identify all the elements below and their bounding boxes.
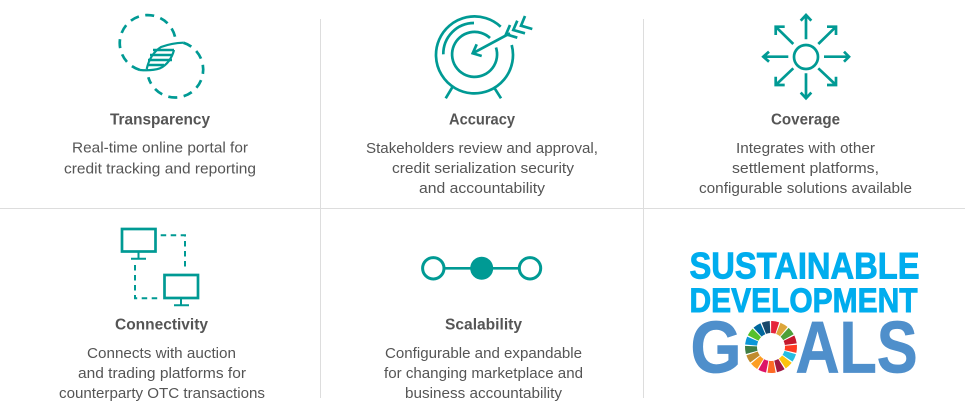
text: accuracy description: and accountability <box>419 180 546 197</box>
panel: scalability <box>384 257 583 402</box>
icon: circle with radiating arrows <box>763 15 849 98</box>
panel: coverage <box>699 15 912 197</box>
heading: Coverage: Coverage <box>771 112 840 128</box>
text: connectivity description <box>59 345 265 402</box>
panel: sustainable development goals logo <box>690 244 920 388</box>
heading: Connectivity: Connectivity <box>115 316 208 334</box>
heading: Transparency: Transparency <box>110 112 210 128</box>
icon: two linked monitors <box>122 229 198 305</box>
logo text: ALS: ALS <box>796 308 918 388</box>
text: coverage description: configurable solutions available <box>699 180 912 197</box>
text: scalability description: Configurable and expandable <box>385 345 582 362</box>
text: coverage description: Integrates with other <box>736 140 875 157</box>
text: accuracy description <box>366 140 598 197</box>
panel: connectivity <box>59 229 265 402</box>
heading: Accuracy: Accuracy <box>449 112 515 128</box>
text: accuracy description: credit serialization security <box>392 160 575 177</box>
text: coverage description: settlement platforms, <box>732 160 879 177</box>
heading: Scalability: Scalability <box>445 316 522 334</box>
text: scalability description: business accountability <box>405 385 562 402</box>
text: transparency description <box>64 140 256 178</box>
panel: accuracy <box>366 16 598 197</box>
icon: 17 colour goals wheel <box>743 319 799 375</box>
text: accuracy description: Stakeholders review and approval, <box>366 140 598 157</box>
text: transparency description: credit tracking and reporting <box>64 160 256 178</box>
icon: three connected nodes <box>423 257 541 280</box>
text: coverage description <box>699 140 912 197</box>
text: connectivity description: and trading platforms for <box>78 365 246 382</box>
text: connectivity description: Connects with auction <box>87 345 236 362</box>
icon: target with arrow <box>436 16 532 98</box>
logo text: G: G <box>690 308 742 388</box>
text: transparency description: Real-time online portal for <box>72 140 248 156</box>
logo text: Development: DEVELOPMENT <box>690 282 918 320</box>
text: scalability description: for changing marketplace and <box>384 365 583 382</box>
text: scalability description <box>384 345 583 402</box>
panel: transparency <box>64 15 256 177</box>
icon: overlapping dashed circles with helix <box>120 15 203 98</box>
text: connectivity description: counterparty OTC transactions <box>59 385 265 402</box>
logo text: Sustainable: SUSTAINABLE <box>690 244 920 286</box>
